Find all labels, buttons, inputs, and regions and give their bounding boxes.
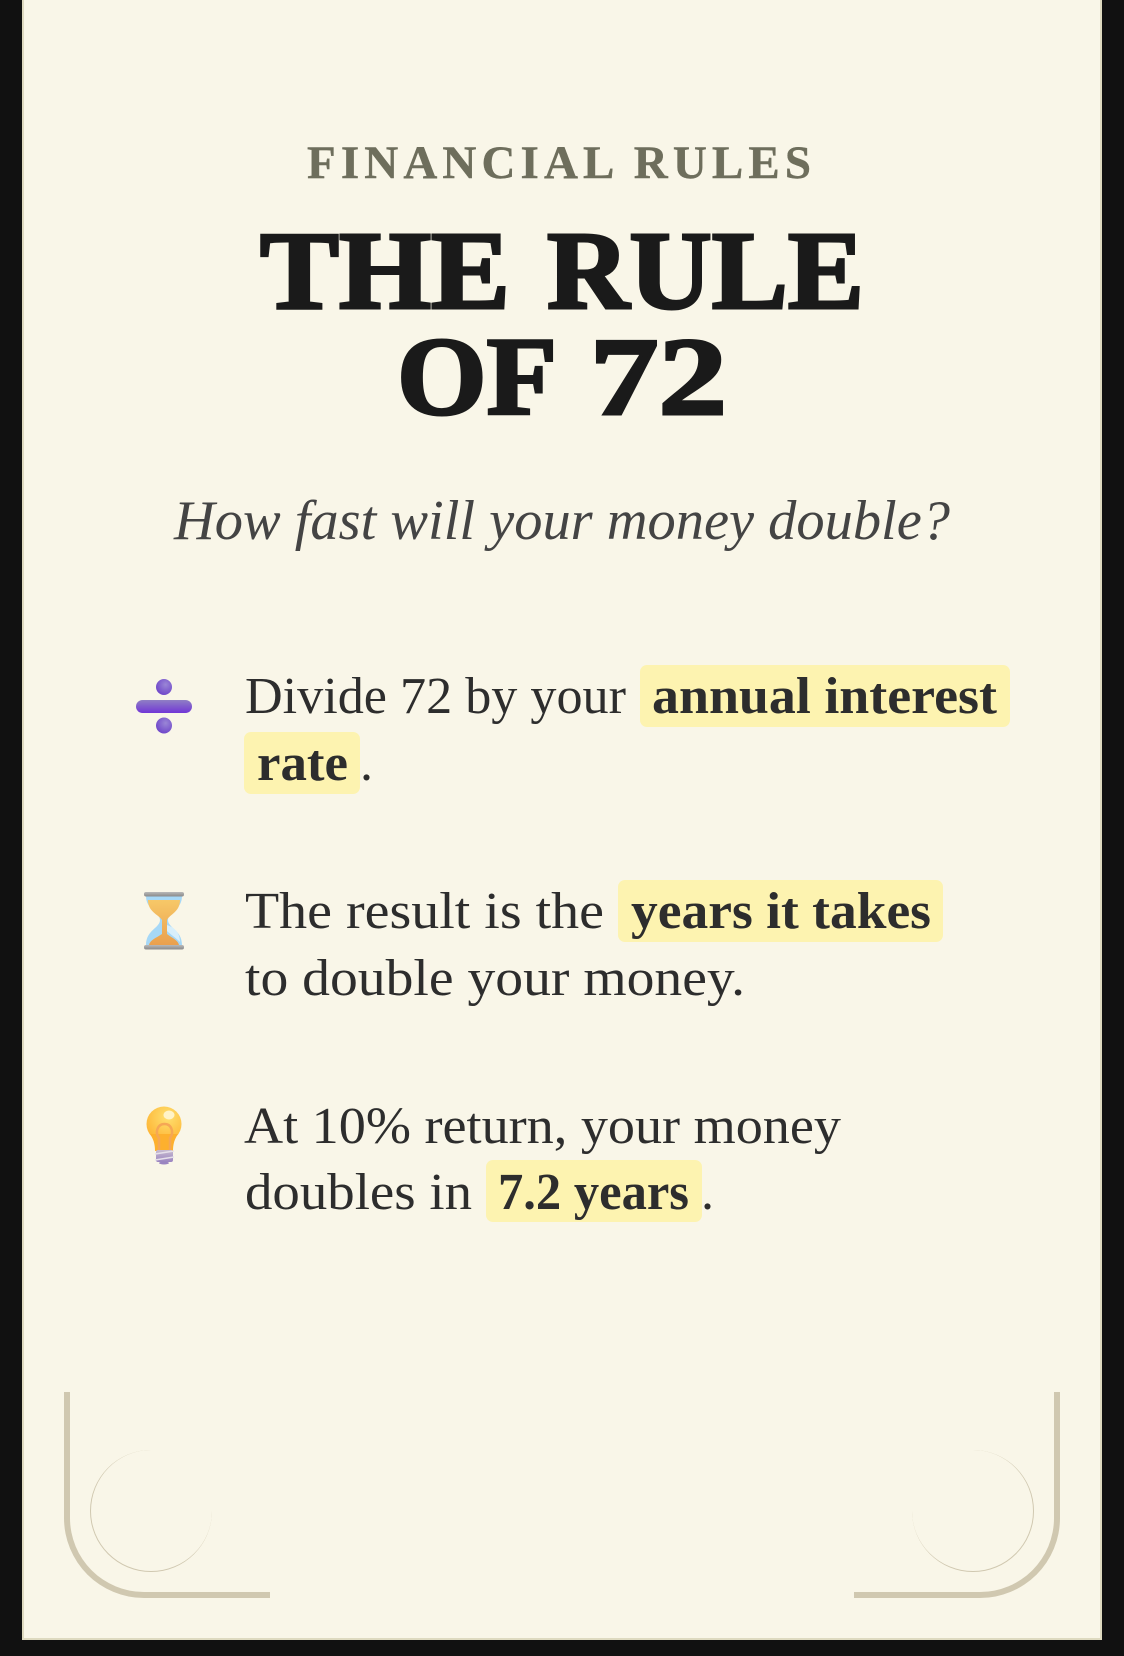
icon: light bulb xyxy=(146,1106,182,1164)
highlight: years it takes xyxy=(618,880,943,942)
text: divide 72: annual interest xyxy=(652,668,998,725)
highlight: annual interest rate xyxy=(244,665,1010,794)
text: at 10% return: 7.2 years xyxy=(498,1164,689,1221)
corner ornament: bottom left xyxy=(64,1392,270,1598)
title xyxy=(260,210,864,439)
title: OF xyxy=(397,316,557,439)
text: at 10% return: . xyxy=(701,1164,714,1221)
list item 2 xyxy=(144,880,943,1007)
title: 72 xyxy=(590,316,727,439)
text: the result: to double your money. xyxy=(245,950,745,1007)
icon: divide xyxy=(136,679,192,734)
text: divide 72: . xyxy=(360,735,373,792)
title: THE xyxy=(260,210,510,333)
icon: hourglass xyxy=(144,892,184,950)
text: divide 72 xyxy=(245,668,998,792)
corner circle: bottom right xyxy=(912,1450,1034,1572)
list item 3 xyxy=(146,1098,841,1222)
corner circle: bottom left xyxy=(90,1450,212,1572)
text: divide 72: rate xyxy=(257,735,348,792)
text: at 10% return: At 10% return, your money xyxy=(244,1098,841,1155)
text: the result: The result is the xyxy=(245,883,604,940)
title: RULE xyxy=(547,210,864,333)
text: the result: years it takes xyxy=(631,883,931,940)
text: the result xyxy=(245,883,931,1007)
text: at 10% return xyxy=(244,1098,841,1221)
text: at 10% return: doubles in xyxy=(245,1164,472,1221)
subtitle: How fast will your money double? xyxy=(173,490,950,552)
text: divide 72: Divide 72 by your xyxy=(245,668,626,725)
corner ornament: bottom right xyxy=(854,1392,1060,1598)
highlight: 7.2 years xyxy=(486,1160,702,1222)
eyebrow label: FINANCIAL RULES xyxy=(307,137,811,189)
list item 1 xyxy=(136,665,1010,794)
